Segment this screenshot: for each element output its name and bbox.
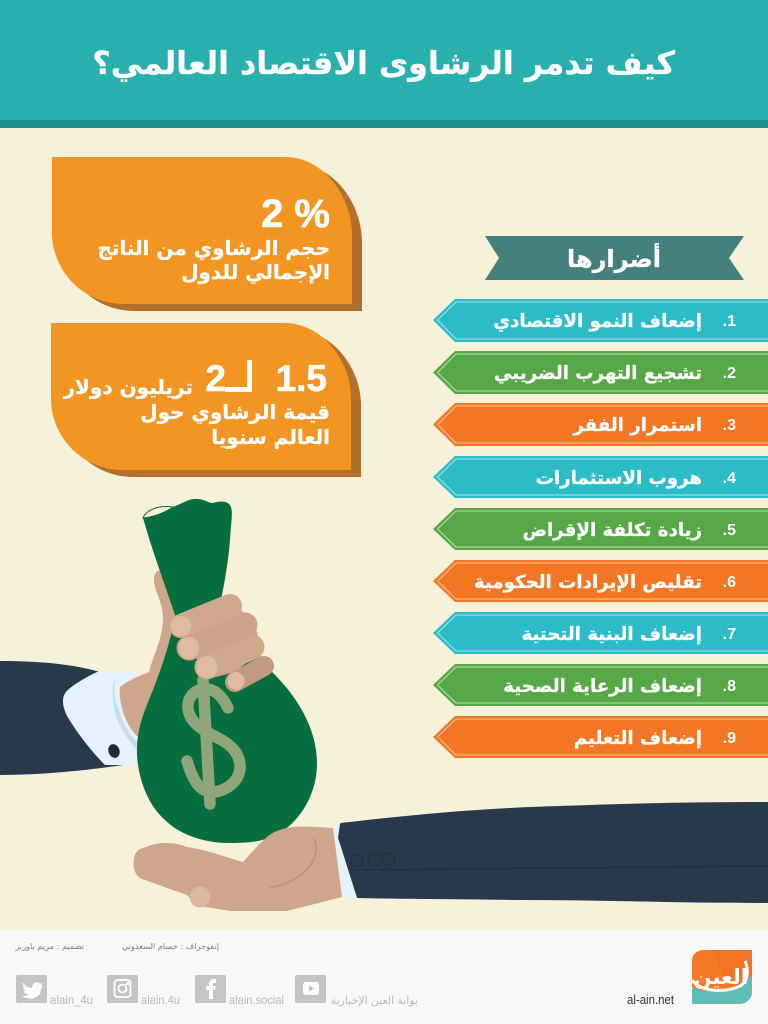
facebook handle: alain.social [229,993,284,1007]
stat: 1.5 to 2 trillion dollars: 2 [205,358,226,399]
list item 6: .6 [723,574,736,591]
icon: instagram [107,975,138,1003]
list item 3 [433,403,768,446]
logo [692,950,752,1004]
list item 2: .2 [723,365,736,382]
stat: 1.5 to 2 trillion dollars: 1.5 [276,358,327,399]
list item 4 [433,456,768,498]
cuff button [106,743,122,759]
icon: facebook [195,975,226,1003]
list item 5: زيادة تكلفة الإقراض [522,520,702,541]
stat description: قيمة الرشاوي حول [140,400,330,425]
stat description: الإجمالي للدول [181,260,330,285]
receiving cuff [333,824,357,898]
list item 5 [433,508,768,550]
icon: twitter [16,975,47,1003]
instagram handle: alain.4u [141,993,180,1007]
stat: 2 percent: 2 % [261,192,330,236]
footer [0,930,768,1024]
panel: annual bribery value [51,323,361,477]
list item 5: .5 [723,522,736,539]
list item 9: .9 [723,730,736,747]
list item 1: .1 [723,313,736,330]
list item 1 [433,299,768,342]
icon: youtube [295,975,326,1003]
hand fold [270,838,316,888]
cuff shade [113,671,137,750]
list item 8 [433,664,768,706]
stat description: العالم سنويا [211,425,330,449]
list item 7: .7 [723,626,736,643]
dollar sign [187,680,240,804]
illustration: hand giving money bag [0,499,768,911]
giving palm and thumb [120,570,185,736]
stat description [140,400,330,449]
credit: design: تصميم : مريم باوزير [14,941,84,951]
list item 8: .8 [723,678,736,695]
list item 4: .4 [723,470,736,487]
list item 9: إضعاف التعليم [574,728,702,749]
list item 1: إضعاف النمو الاقتصادي [493,311,702,333]
header banner [0,0,768,128]
list item 2: تشجيع التهرب الضريبي [494,363,702,384]
receiving hand [134,827,342,911]
gripping fingers [170,597,264,690]
list item 7 [433,612,768,654]
shirt cuff [63,671,140,765]
list item 3: استمرار الفقر [572,415,702,436]
stat: 1.5 to 2 trillion dollars [63,358,327,399]
sleeve buttons [350,853,768,870]
panel: bribery share of GDP [52,157,362,311]
ribbon heading: harms [485,236,744,280]
list of harms [433,299,768,758]
list item 4: هروب الاستثمارات [536,468,702,489]
list item 7: إضعاف البنية التحتية [521,624,702,645]
twitter handle: alain_4u [50,993,93,1007]
stat: 1.5 to 2 trillion dollars: تريليون دولار [63,375,193,399]
list item 2 [433,351,768,394]
money bag [137,499,317,843]
logo: العين [694,965,748,989]
list item 8: إضعاف الرعاية الصحية [503,676,702,697]
list item 3: .3 [723,417,736,434]
finger nails [170,616,244,690]
thumb tip [190,886,210,908]
title: كيف تدمر الرشاوى الاقتصاد العالمي؟ [92,45,676,82]
giving sleeve [0,661,130,775]
bag opening [143,507,173,518]
list item 6 [433,560,768,602]
ribbon heading: harms: أضرارها [567,243,661,273]
website: al-ain.net [627,992,674,1007]
list item 6: تقليص الإيرادات الحكومية [474,572,702,593]
receiving sleeve [338,802,768,903]
list item 9 [433,716,768,758]
youtube channel name: بوابة العين الإخبارية [331,995,418,1007]
credit: infographic: إنفوجراف : حسام السعدوني [122,941,219,952]
stat description: حجم الرشاوي من الناتج [98,236,330,261]
stat description [98,236,330,285]
